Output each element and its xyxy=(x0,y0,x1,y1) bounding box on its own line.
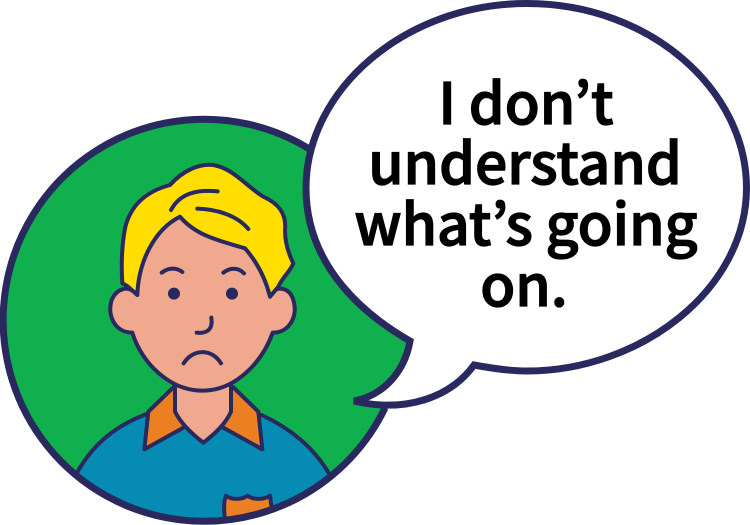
circle outline xyxy=(3,119,385,521)
hair strands xyxy=(171,191,248,229)
speech text: on. xyxy=(480,241,568,323)
speech text: what’s going xyxy=(354,180,698,262)
frowning mouth xyxy=(184,352,221,363)
eyes xyxy=(168,288,180,300)
orange collar xyxy=(144,387,262,449)
shirt pocket xyxy=(222,494,274,517)
speech text: I don’t xyxy=(438,59,614,141)
speech text xyxy=(354,59,698,323)
bubble shape xyxy=(306,4,746,405)
eyebrows xyxy=(162,269,244,273)
nose xyxy=(197,318,212,333)
green circle background xyxy=(0,116,408,524)
illustration: man in green circle xyxy=(0,116,408,525)
yellow hair xyxy=(122,165,293,297)
speech bubble xyxy=(306,4,746,405)
neck xyxy=(175,383,231,443)
man figure xyxy=(77,165,330,525)
blue shirt xyxy=(77,413,330,525)
speech text: understand xyxy=(368,119,682,201)
head with ears xyxy=(110,217,295,391)
